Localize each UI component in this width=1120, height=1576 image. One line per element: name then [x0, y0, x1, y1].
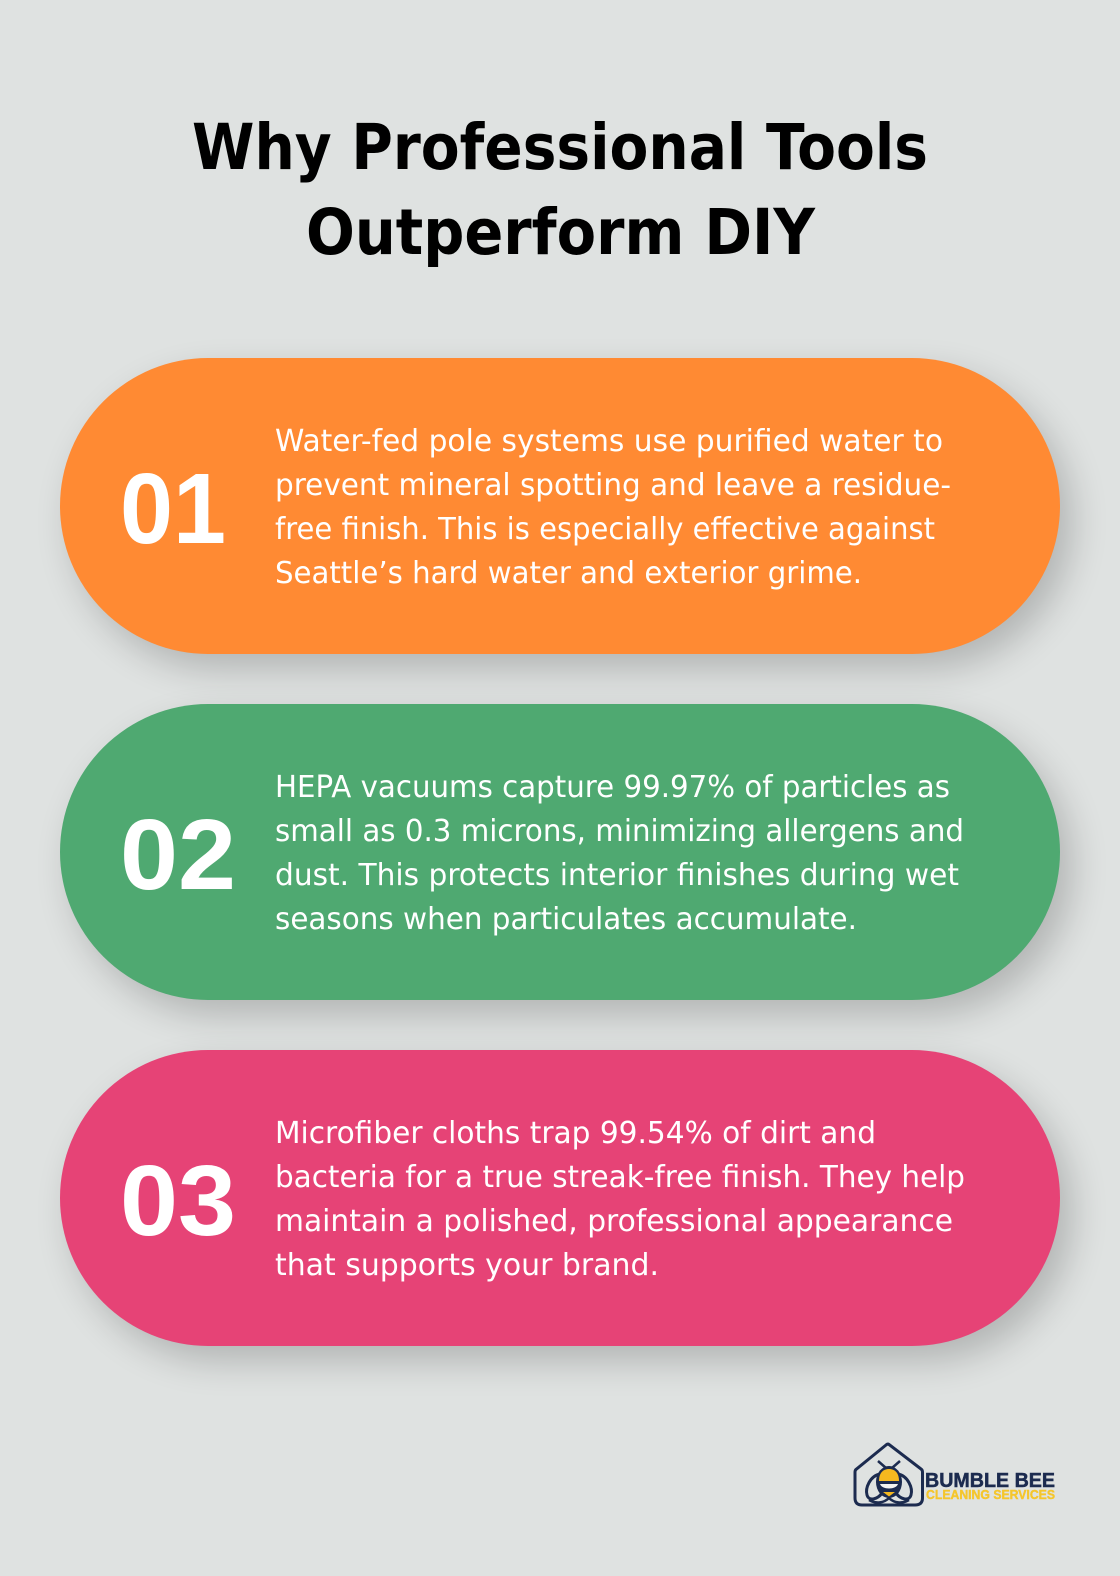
number 01: 01 [120, 453, 226, 565]
panel: step 02 HEPA vacuums [60, 704, 1072, 1015]
text block: step 02: seasons when particulates accumulate. [275, 902, 857, 937]
icon: house with bee [855, 1444, 922, 1505]
panel: step 03 microfiber cloths [60, 1050, 1072, 1361]
text block: step 01: free finish. This is especially effective against [275, 512, 935, 547]
text block: step 03: maintain a polished, professional appearance [275, 1204, 953, 1239]
text block: step 01: Water-fed pole systems use purified water to [275, 424, 943, 459]
logo: Bumble Bee Cleaning Services [855, 1444, 1055, 1505]
number 03: 03 [120, 1145, 236, 1257]
text block: step 02 [275, 770, 964, 937]
text block: step 02: HEPA vacuums capture 99.97% of particles as [275, 770, 950, 805]
logo wordmark: BUMBLE BEE [925, 1470, 1055, 1492]
text block: step 02: dust. This protects interior finishes during wet [275, 858, 959, 893]
text block: step 03 [275, 1116, 965, 1283]
text block: step 01: prevent mineral spotting and leave a residue- [275, 468, 951, 503]
title: Outperform DIY [306, 196, 816, 269]
text block: step 02: small as 0.3 microns, minimizing allergens and [275, 814, 964, 849]
text block: step 01: Seattle’s hard water and exterior grime. [275, 556, 862, 591]
title [192, 111, 928, 269]
title: Why Professional Tools [192, 111, 928, 184]
text block: step 03: Microfiber cloths trap 99.54% of dirt and [275, 1116, 876, 1151]
number 02: 02 [120, 799, 236, 911]
text block: step 03: that supports your brand. [275, 1248, 659, 1283]
text block: step 01 [275, 424, 951, 591]
panel: step 01 water-fed pole systems [60, 358, 1072, 669]
logo tagline: CLEANING SERVICES [926, 1488, 1055, 1502]
text block: step 03: bacteria for a true streak-free finish. They help [275, 1160, 965, 1195]
